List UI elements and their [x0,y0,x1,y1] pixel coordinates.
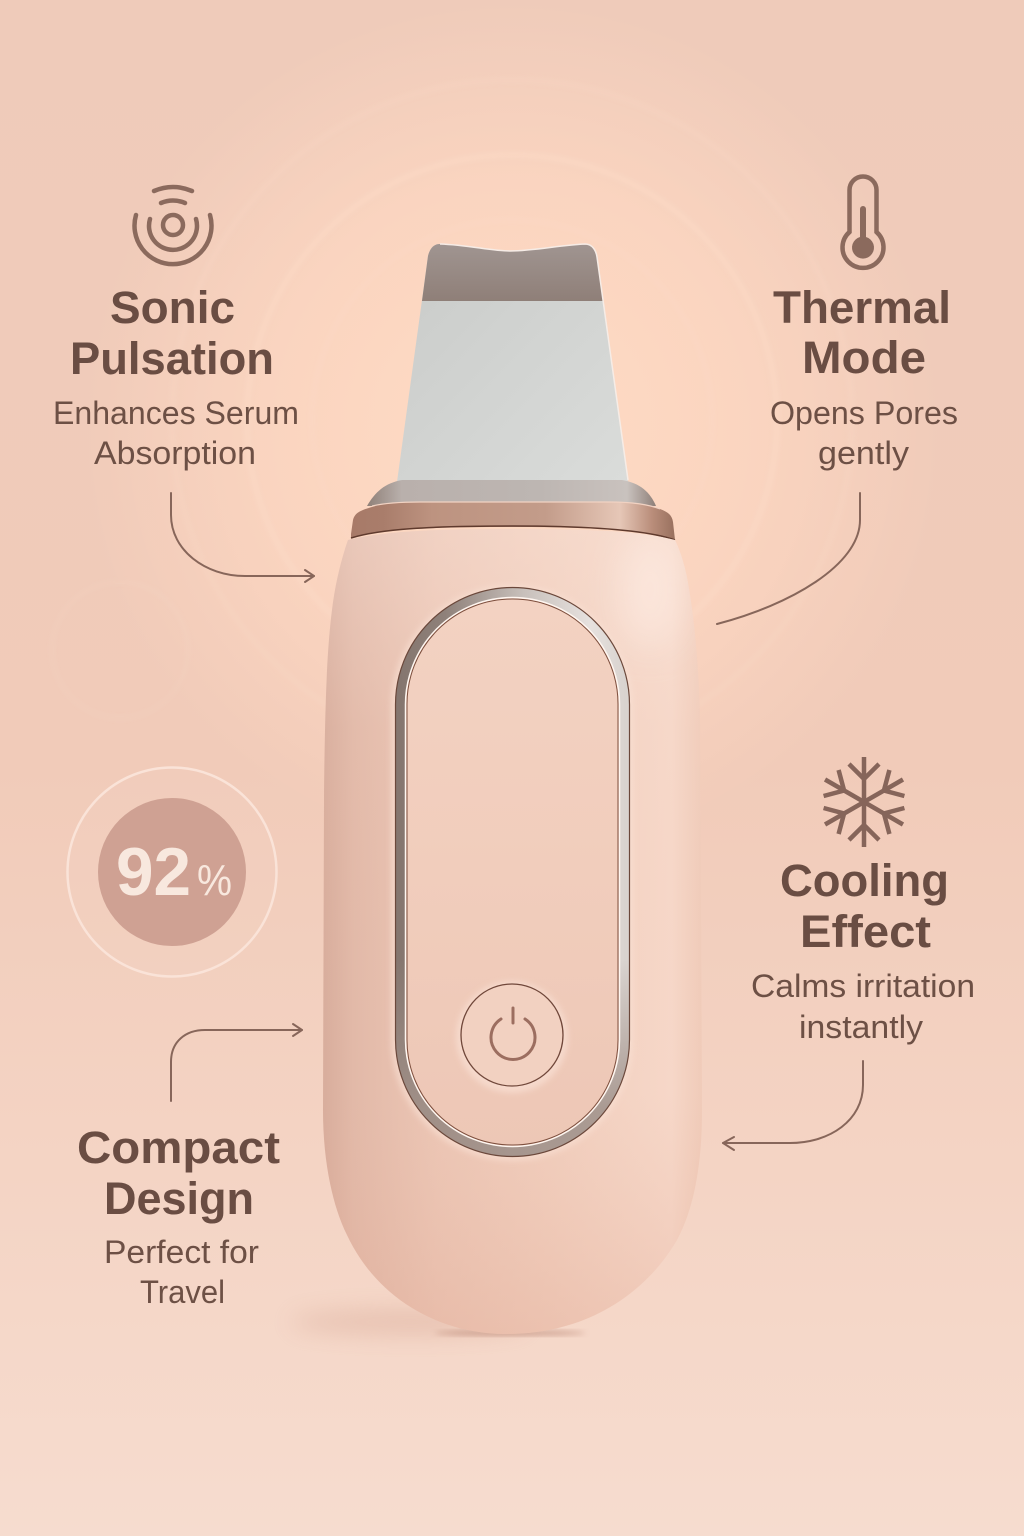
heading: Cooling [780,855,949,906]
device body [320,525,710,1337]
stat value [116,834,232,910]
description [751,968,975,1045]
description [770,395,958,471]
callout: Sonic Pulsation [53,187,314,582]
heading: Compact [77,1122,280,1173]
heading: Effect [800,906,931,957]
rose gold collar [351,502,675,540]
arrow [171,493,314,582]
heading: Thermal [773,282,951,333]
control panel [391,585,633,1161]
arrow [717,493,860,624]
heading [773,282,951,383]
description: Calms irritation [751,968,975,1004]
metal neck [367,480,656,506]
icon: sonic waves [134,187,212,264]
stat value: % [197,856,232,905]
description: Travel [140,1274,225,1310]
stat value: 92 [116,834,191,910]
power button [456,981,568,1093]
heading: Design [104,1173,254,1224]
device shadow [290,1310,585,1336]
description: Absorption [94,435,256,471]
icon: snowflake [818,757,910,847]
stat badge: 92% [68,768,276,976]
heading [77,1122,280,1224]
heading: Pulsation [70,333,274,384]
description: Perfect for [104,1234,259,1270]
heading: Sonic [110,282,235,333]
heading: Mode [802,332,926,383]
device [320,244,710,1337]
description [104,1234,259,1310]
arrow [723,1061,863,1150]
icon: thermometer [842,176,883,268]
description: instantly [799,1009,923,1045]
description: gently [818,435,909,471]
heading [780,855,949,957]
callout: Compact Design [77,1024,302,1310]
arrow [171,1024,302,1101]
blade [397,244,628,482]
callout: Thermal Mode [717,176,958,624]
description [53,395,299,471]
callout: Cooling Effect [723,757,975,1150]
description: Opens Pores [770,395,958,431]
icon: power symbol [491,1008,535,1059]
heading [70,282,274,384]
description: Enhances Serum [53,395,299,431]
